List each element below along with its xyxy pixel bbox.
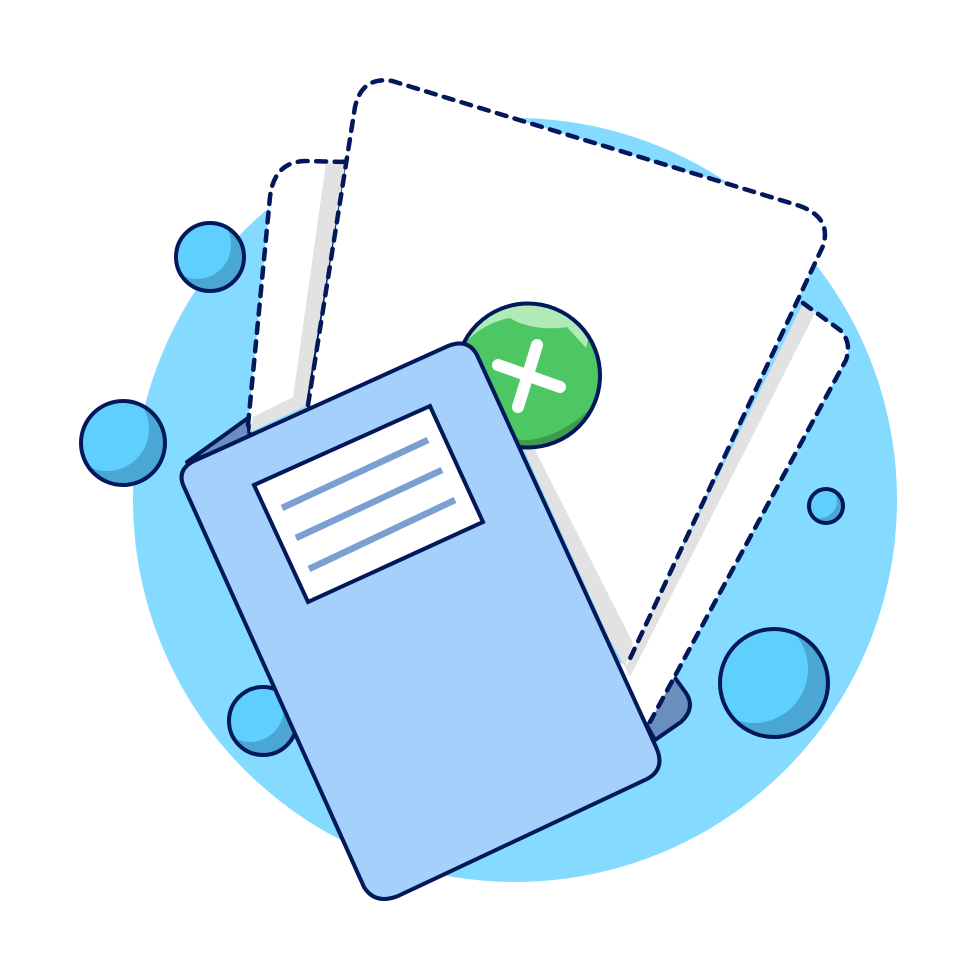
illustration: folder with dashed documents [79,78,897,901]
document: back left [248,161,348,432]
bubble: far left [79,399,167,487]
folder back cover: bottom right [645,675,690,740]
bubble: small right [803,484,843,523]
folder label [254,406,483,602]
document: back right [612,303,848,722]
bubble: large lower right [718,627,830,739]
bubble: lower left [227,685,295,757]
folder back cover: top left [187,418,250,462]
plus glyph [498,345,560,407]
document: front large [308,80,825,667]
badge: green circle with plus [462,302,602,450]
background circle [133,118,897,882]
badge highlight [467,306,588,348]
folder front cover [182,343,659,899]
badge shadow [518,410,589,446]
bubble: upper left [174,221,246,293]
